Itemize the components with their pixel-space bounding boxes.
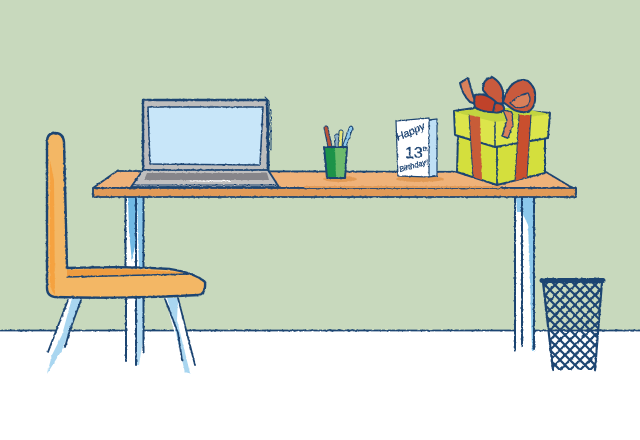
floor line xyxy=(0,330,640,332)
ribbon bow xyxy=(460,77,535,138)
card text xyxy=(394,120,430,174)
bow loop: upper left xyxy=(483,77,503,105)
cup xyxy=(324,147,347,178)
ribbon: right band xyxy=(515,115,531,181)
bow knot xyxy=(493,103,504,113)
laptop lid xyxy=(143,100,268,172)
laptop xyxy=(131,97,279,187)
scene objects xyxy=(0,76,640,374)
gift box xyxy=(454,77,550,185)
bow loop hole xyxy=(510,93,530,108)
laptop screen xyxy=(148,107,263,165)
card text: th xyxy=(423,147,428,153)
laptop keyboard xyxy=(144,173,269,180)
desk front edge xyxy=(93,188,576,197)
cup shadow xyxy=(323,176,357,182)
card text: Birthday! xyxy=(398,157,430,174)
ribbon: left band xyxy=(469,115,482,180)
chair back and seat xyxy=(47,133,205,298)
bow tail: upper left xyxy=(460,78,476,104)
bow loop: right xyxy=(503,80,535,112)
bin sides xyxy=(543,282,602,370)
desk top surface xyxy=(93,171,576,190)
bin rim xyxy=(542,278,603,283)
chair rear leg xyxy=(165,298,195,365)
desk xyxy=(93,171,576,197)
wall xyxy=(0,0,640,330)
box lid xyxy=(454,107,550,147)
bin mesh xyxy=(544,282,601,370)
bow loop: lower left xyxy=(474,94,497,112)
chair xyxy=(47,133,205,374)
card text: Happy xyxy=(394,120,428,144)
chair back shading xyxy=(50,160,55,295)
laptop base xyxy=(131,170,279,187)
pen cup xyxy=(323,128,357,182)
card front xyxy=(396,118,429,177)
chair front leg xyxy=(48,298,81,352)
card back xyxy=(428,119,437,177)
floor xyxy=(0,330,640,440)
box body xyxy=(457,136,545,185)
waste bin xyxy=(540,278,606,372)
bow tail: hanging xyxy=(502,110,513,138)
desk leg: left xyxy=(126,197,144,365)
card text: 13 xyxy=(405,145,423,162)
pencils xyxy=(326,128,330,147)
card shadow xyxy=(396,176,444,182)
birthday card xyxy=(394,118,444,182)
chair seat shading xyxy=(67,269,185,277)
desk leg: right xyxy=(515,197,534,352)
